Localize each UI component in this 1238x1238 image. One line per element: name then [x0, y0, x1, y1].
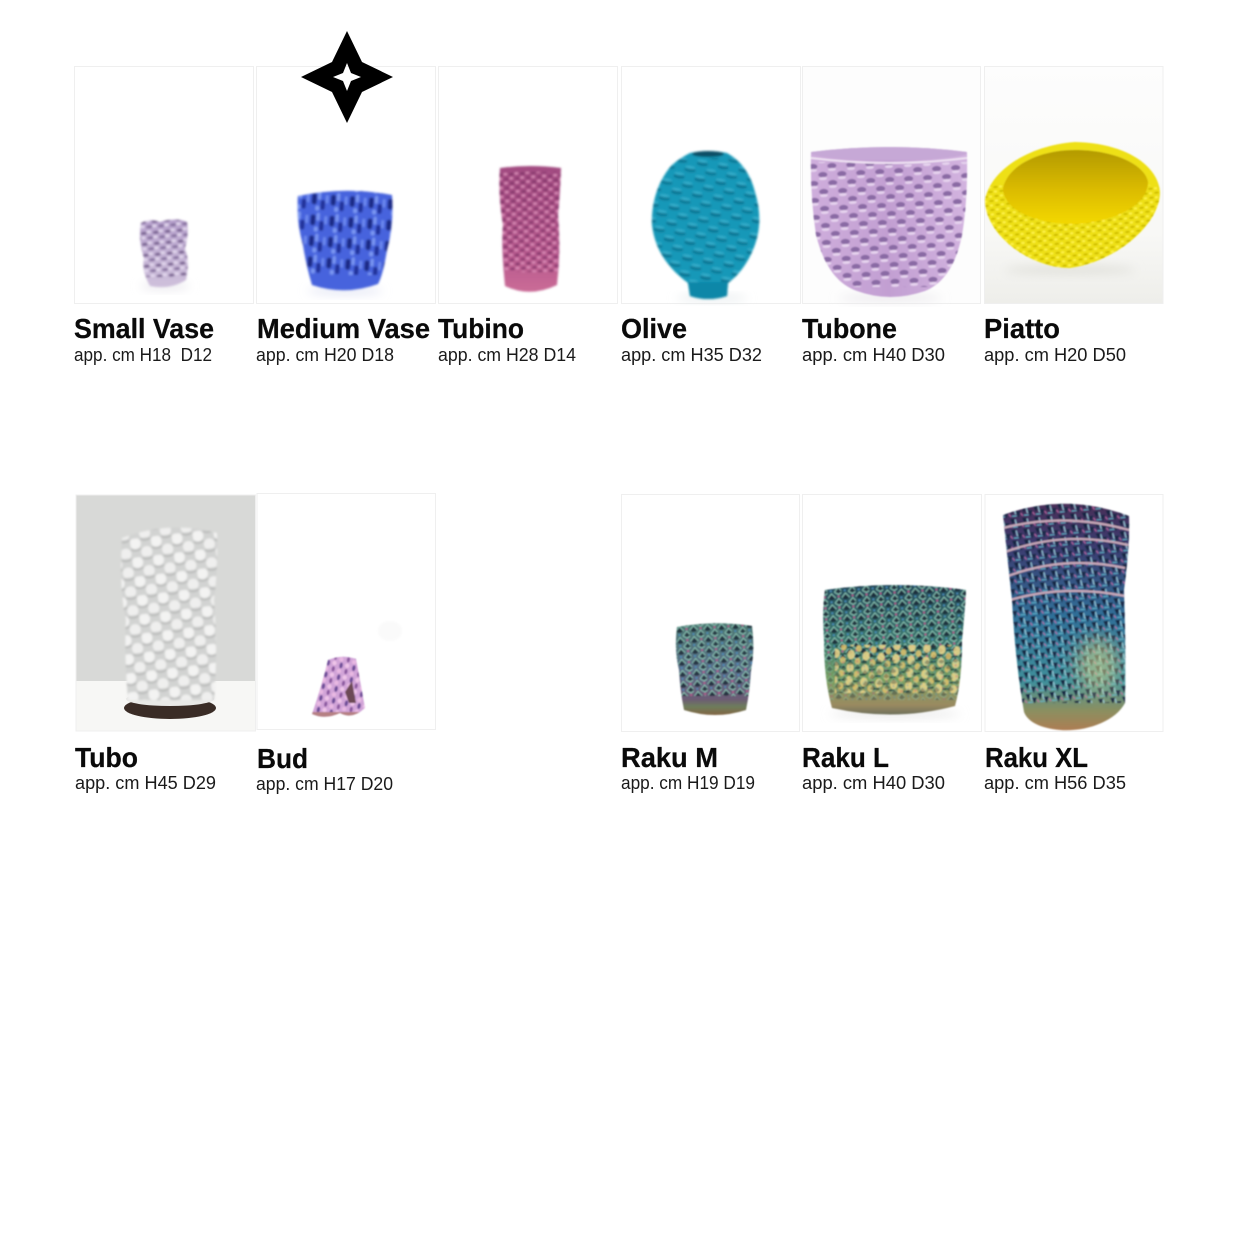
- name: Raku XL: Raku XL: [985, 742, 1088, 773]
- dimensions: Raku M: app. cm H19 D19: [621, 773, 755, 793]
- name: Tubo: Tubo: [75, 742, 138, 773]
- image: teal olive vase: [622, 66, 800, 304]
- name: Bud: Bud: [257, 743, 308, 774]
- image: medium blue vase: [256, 66, 436, 304]
- image: small iridescent raku vase: [622, 494, 800, 732]
- name: Raku L: Raku L: [802, 742, 889, 773]
- icon: four-point star: [301, 31, 393, 123]
- dimensions: Raku XL: app. cm H56 D35: [984, 773, 1126, 793]
- dimensions: Small Vase: app. cm H18 D12: [74, 345, 212, 365]
- image: white vase on dark base: [76, 495, 256, 731]
- name: Small Vase: Small Vase: [74, 313, 214, 344]
- panel: Small Vase: [74, 66, 254, 365]
- image: small lilac vase: [74, 66, 254, 304]
- dimensions: Bud: app. cm H17 D20: [256, 774, 393, 794]
- panel: Raku L: [802, 494, 982, 793]
- name: Tubino: Tubino: [438, 313, 524, 344]
- dimensions: Olive: app. cm H35 D32: [621, 345, 762, 365]
- image: large iridescent raku bowl: [802, 494, 982, 732]
- dimensions: Tubino: app. cm H28 D14: [438, 345, 576, 365]
- name: Medium Vase: Medium Vase: [257, 313, 430, 344]
- dimensions: Piatto: app. cm H20 D50: [984, 345, 1126, 365]
- panel: Olive: [621, 66, 800, 365]
- name: Olive: Olive: [621, 313, 687, 344]
- panel: Bud: [256, 494, 436, 794]
- panel: Raku XL: [984, 494, 1163, 793]
- panel: Tubino: [438, 66, 618, 365]
- name: Tubone: Tubone: [802, 313, 897, 344]
- dimensions: Tubone: app. cm H40 D30: [802, 345, 945, 365]
- name: Raku M: Raku M: [621, 742, 718, 773]
- panel: Tubo: [75, 495, 256, 793]
- dimensions: Tubo: app. cm H45 D29: [75, 773, 216, 793]
- image: tall iridescent raku vase: [985, 494, 1163, 734]
- image: tall magenta vase: [438, 66, 618, 304]
- panel: Tubone: [802, 66, 980, 365]
- panel: Raku M: [621, 494, 800, 793]
- name: Piatto: Piatto: [984, 313, 1060, 344]
- image: yellow bowl: [980, 66, 1164, 304]
- panel: Medium Vase: [256, 66, 436, 365]
- panel: Piatto: [980, 66, 1164, 365]
- dimensions: Raku L: app. cm H40 D30: [802, 773, 945, 793]
- dimensions: Medium Vase: app. cm H20 D18: [256, 345, 394, 365]
- image: small pink bud: [257, 494, 436, 730]
- image: large lilac bowl: [802, 66, 980, 305]
